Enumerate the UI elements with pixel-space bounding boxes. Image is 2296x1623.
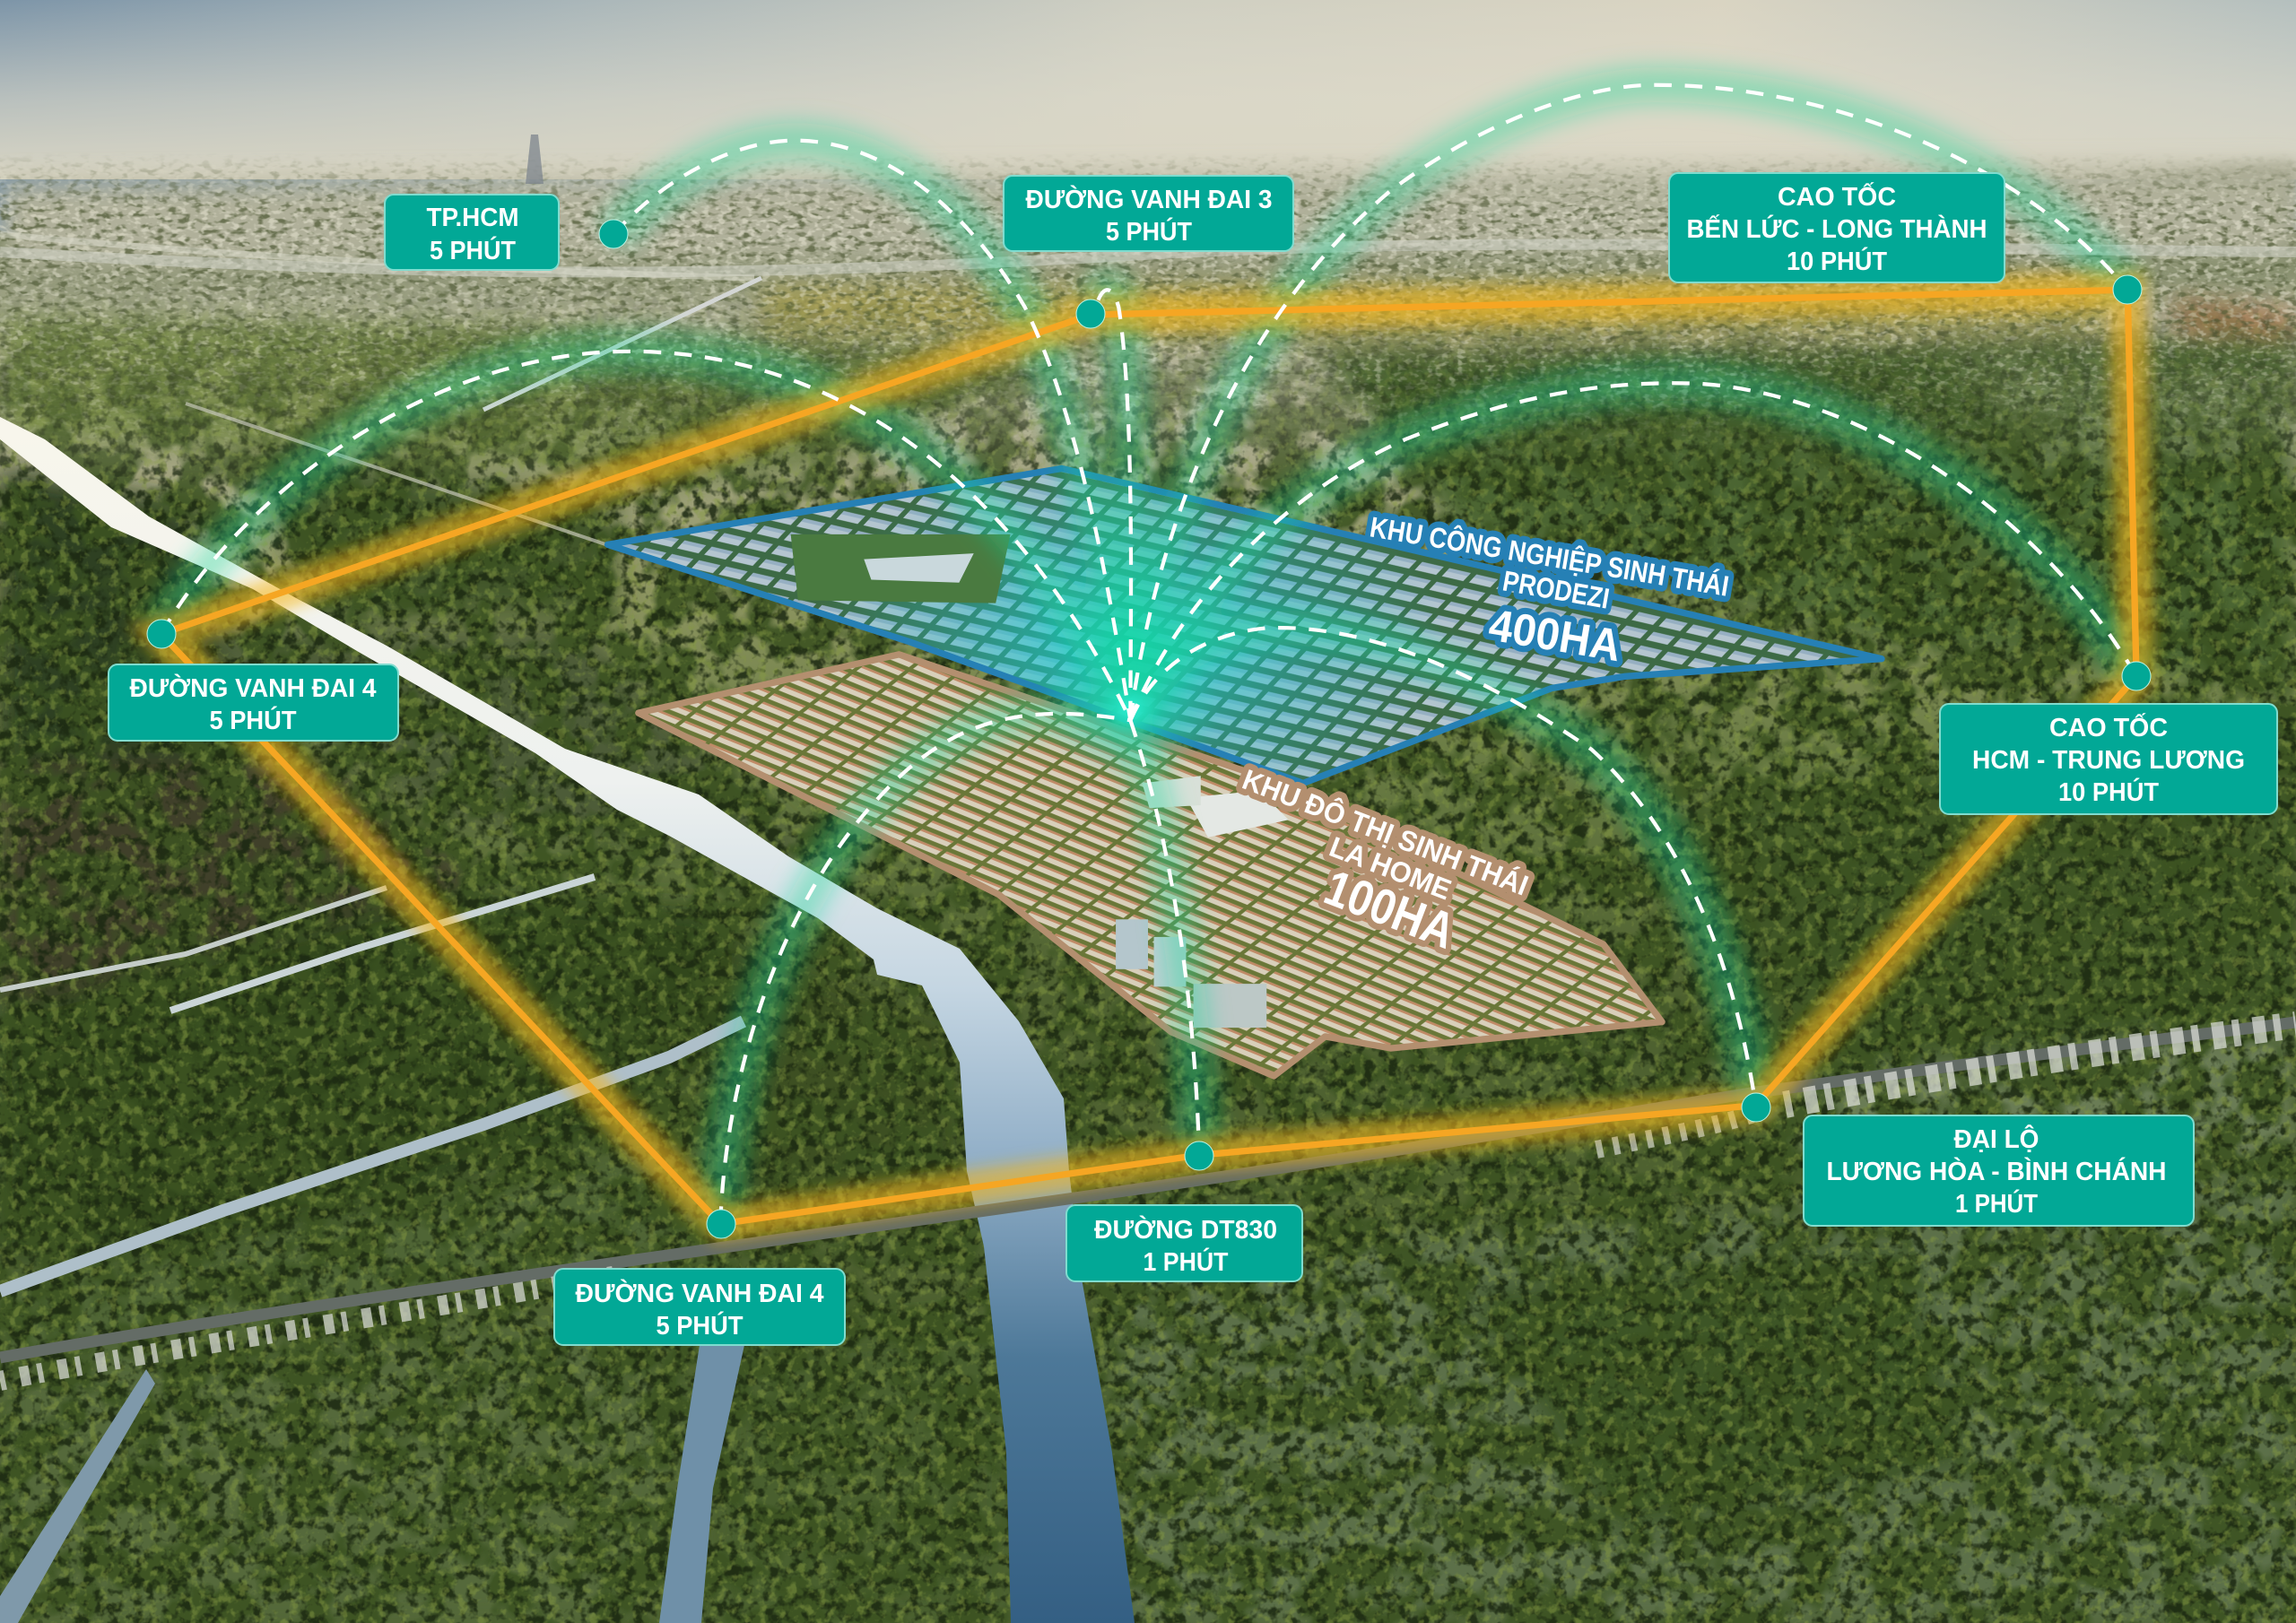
callout: Cao toc Ben Luc - Long Thanh: BẾN LỨC - LONG THÀNH [1686,213,1987,244]
callout: TP.HCM [385,195,559,270]
callout: TP.HCM: 5 PHÚT [430,235,516,265]
callout: Duong Vanh Dai 4 bottom: 5 PHÚT [657,1310,744,1341]
callout: Dai lo Luong Hoa - Binh Chanh: 1 PHÚT [1955,1188,2038,1219]
callout: Duong Vanh Dai 4 left: ĐƯỜNG VANH ĐAI 4 [129,673,377,703]
town texture near horizon [0,152,2296,466]
label: KCN Prodezi: KHU CÔNG NGHIỆP SINH THÁI [1368,510,1731,603]
callout: Duong Vanh Dai 4 left: 5 PHÚT [210,705,297,735]
callout: Duong DT830: ĐƯỜNG DT830 [1094,1214,1277,1245]
callout: TP.HCM: TP.HCM [427,204,518,232]
label: KCN Prodezi [1368,510,1731,671]
callout: Cao toc Ben Luc - Long Thanh: 10 PHÚT [1787,246,1887,276]
callout: Duong Vanh Dai 3: 5 PHÚT [1106,216,1192,247]
callout: Duong Vanh Dai 3 [1004,176,1293,251]
callout: Dai lo Luong Hoa - Binh Chanh: ĐẠI LỘ [1953,1124,2039,1154]
callout: Duong Vanh Dai 4 bottom [554,1269,845,1345]
callout: Cao toc HCM - Trung Luong: CAO TỐC [2049,712,2168,742]
label: KDT La Home: KHU ĐÔ THỊ SINH THÁI [1238,763,1533,902]
panel: industrial park Prodezi 400ha [604,464,1885,785]
callout: Cao toc HCM - Trung Luong [1940,704,2277,814]
orange ring road connections [161,290,2136,1224]
orange ring road connections glow [161,290,2136,1224]
callout: Duong DT830: 1 PHÚT [1143,1246,1229,1277]
callout: Cao toc Ben Luc - Long Thanh [1669,173,2005,282]
focal glow at project centre [1040,637,1220,780]
label: KCN Prodezi: 400HA [1485,600,1624,671]
callout: Duong Vanh Dai 4 left [109,664,398,741]
label: KCN Prodezi: PRODEZI [1500,564,1612,615]
callout: Duong Vanh Dai 4 bottom: ĐƯỜNG VANH ĐAI 4 [576,1278,823,1308]
callout: Cao toc Ben Luc - Long Thanh: CAO TỐC [1778,181,1896,212]
sky [0,0,2296,233]
callout: Duong Vanh Dai 3: ĐƯỜNG VANH ĐAI 3 [1026,184,1272,214]
callout: Cao toc HCM - Trung Luong: HCM - TRUNG LƯƠNG [1972,746,2245,775]
callout: Dai lo Luong Hoa - Binh Chanh [1804,1115,2194,1226]
label: KDT La Home: LA HOME [1325,830,1456,906]
route node dots [147,220,2151,1238]
green glow behind route arcs [161,85,2136,1224]
panel: urban area La Home 100ha [639,655,1662,1076]
callout: Cao toc HCM - Trung Luong: 10 PHÚT [2058,777,2159,807]
callout: Duong DT830 [1066,1205,1302,1281]
label: KDT La Home: 100HA [1318,858,1463,959]
callout: Dai lo Luong Hoa - Binh Chanh: LƯƠNG HÒA - BÌNH CHÁNH [1826,1156,2167,1186]
dashed white route arcs [161,85,2136,1224]
